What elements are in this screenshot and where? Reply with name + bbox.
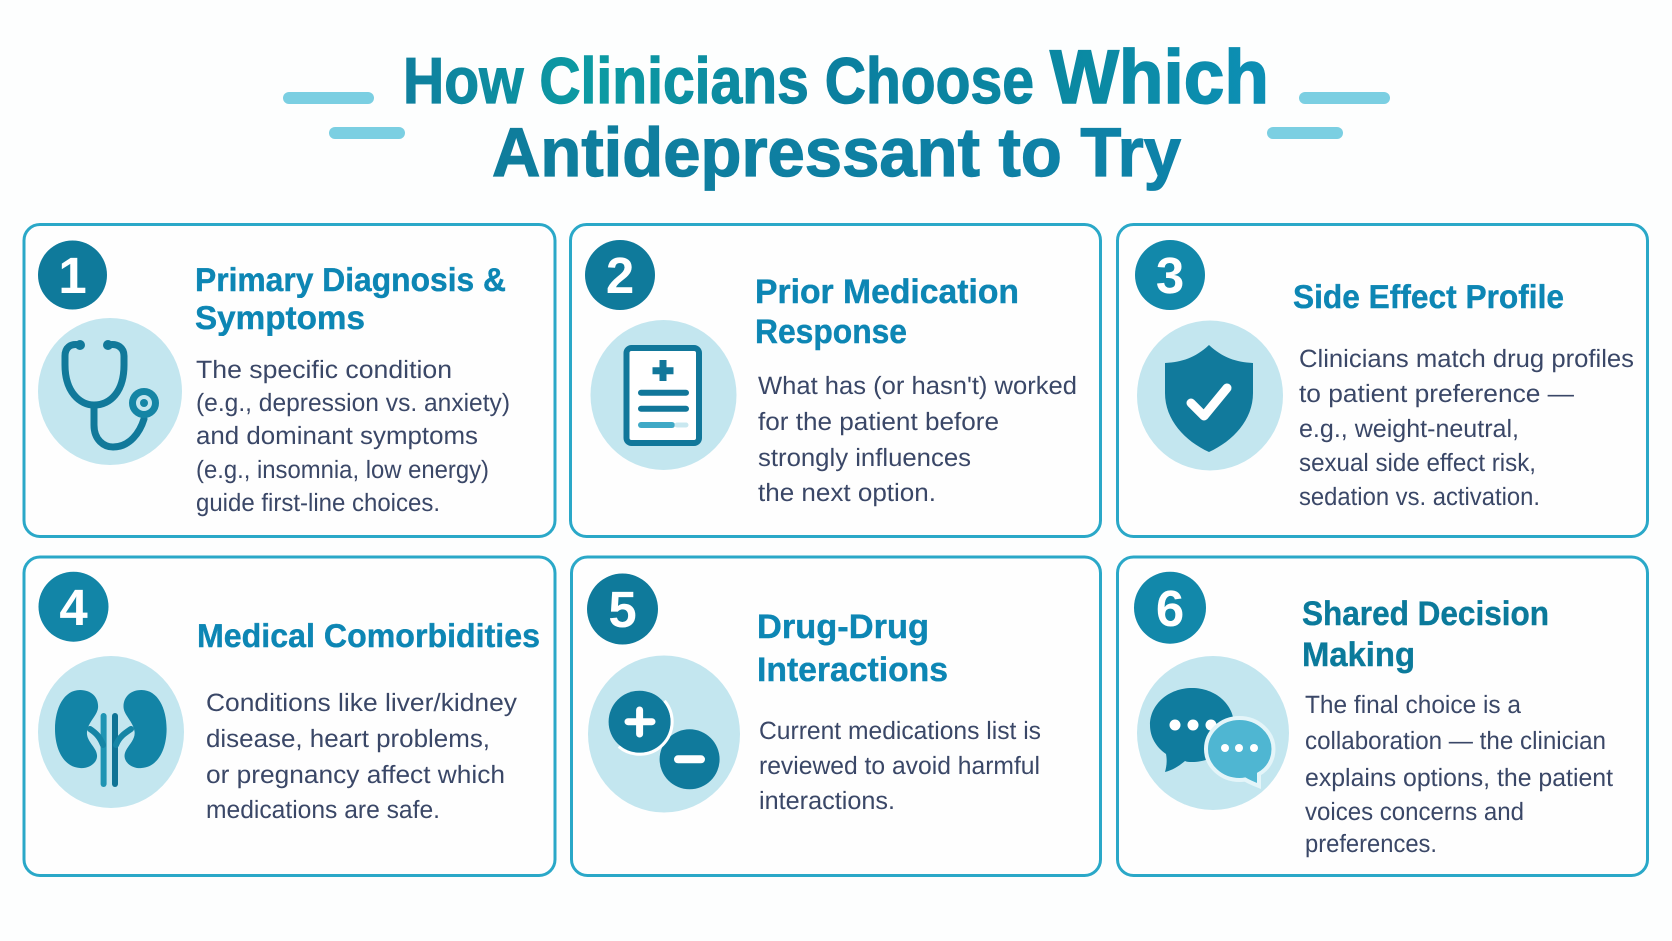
body text: Conditions like liver/kidney bbox=[206, 689, 518, 717]
title accent bars: left bbox=[283, 92, 405, 139]
number badge 4: 4 bbox=[59, 579, 88, 636]
icon: kidneys bbox=[38, 656, 184, 808]
number badge 1 bbox=[38, 240, 107, 310]
number badge 6: 6 bbox=[1156, 580, 1184, 637]
heading: Symptoms bbox=[195, 299, 365, 336]
body text: Clinicians match drug profiles bbox=[1299, 345, 1634, 373]
heading: Drug-Drug bbox=[757, 608, 929, 646]
body text bbox=[759, 717, 1041, 815]
title: Antidepressant to Try bbox=[492, 114, 1181, 191]
heading: Response bbox=[755, 313, 907, 351]
title: Which bbox=[1050, 35, 1269, 120]
body text: for the patient before bbox=[758, 408, 999, 436]
body text: or pregnancy affect which bbox=[206, 761, 505, 789]
body text bbox=[1299, 345, 1634, 511]
body text: explains options, the patient bbox=[1305, 764, 1613, 792]
number badge 1: 1 bbox=[58, 247, 87, 304]
heading: Making bbox=[1302, 636, 1415, 674]
body text bbox=[206, 689, 518, 824]
body text: collaboration — the clinician bbox=[1305, 727, 1606, 755]
body text: the next option. bbox=[758, 479, 936, 507]
body text: interactions. bbox=[759, 787, 895, 815]
icon: medical document bbox=[590, 320, 736, 470]
body text: e.g., weight-neutral, bbox=[1299, 415, 1519, 443]
icon: stethoscope bbox=[38, 318, 182, 465]
body text: guide first-line choices. bbox=[196, 489, 440, 517]
heading bbox=[757, 608, 948, 689]
body text bbox=[758, 372, 1077, 507]
icon: shield with check bbox=[1137, 320, 1283, 470]
body text bbox=[1305, 691, 1613, 858]
number badge 2 bbox=[585, 240, 655, 310]
body text: to patient preference — bbox=[1299, 380, 1574, 408]
body text: The final choice is a bbox=[1305, 691, 1521, 719]
body text: reviewed to avoid harmful bbox=[759, 752, 1040, 780]
panel: primary diagnosis and symptoms bbox=[24, 224, 555, 536]
body text: medications are safe. bbox=[206, 796, 440, 824]
heading: Medical Comorbidities bbox=[197, 617, 540, 654]
panel: shared decision making bbox=[1118, 557, 1648, 876]
number badge 3 bbox=[1135, 240, 1205, 310]
number badge 5: 5 bbox=[608, 581, 637, 638]
heading bbox=[755, 273, 1019, 351]
panel: side effect profile bbox=[1118, 224, 1648, 536]
title bbox=[403, 35, 1269, 191]
heading bbox=[1302, 595, 1549, 674]
number badge 3: 3 bbox=[1156, 247, 1184, 304]
title: How Clinicians Choose bbox=[403, 44, 1034, 117]
heading bbox=[195, 261, 506, 336]
body text: sedation vs. activation. bbox=[1299, 483, 1540, 511]
panel: medical comorbidities bbox=[24, 557, 555, 876]
number badge 6 bbox=[1134, 572, 1206, 644]
body text: The specific condition bbox=[196, 356, 452, 384]
number badge 4 bbox=[38, 572, 108, 642]
icon: plus and minus bbox=[588, 656, 740, 812]
body text: preferences. bbox=[1305, 830, 1437, 858]
number badge 2: 2 bbox=[606, 247, 634, 304]
heading: Side Effect Profile bbox=[1293, 278, 1564, 315]
panel: drug-drug interactions bbox=[572, 557, 1100, 876]
heading: Interactions bbox=[757, 651, 948, 689]
body text bbox=[196, 356, 510, 517]
heading: Prior Medication bbox=[755, 273, 1019, 311]
body text: and dominant symptoms bbox=[196, 422, 478, 450]
panel: prior medication response bbox=[570, 224, 1100, 536]
body text: disease, heart problems, bbox=[206, 725, 490, 753]
body text: Current medications list is bbox=[759, 717, 1041, 745]
body text: (e.g., insomnia, low energy) bbox=[196, 456, 489, 484]
heading: Shared Decision bbox=[1302, 595, 1549, 633]
heading: Primary Diagnosis & bbox=[195, 261, 506, 298]
body text: (e.g., depression vs. anxiety) bbox=[196, 389, 510, 417]
number badge 5 bbox=[587, 574, 658, 644]
icon: chat bubbles bbox=[1137, 656, 1289, 810]
title accent bars: right bbox=[1267, 92, 1390, 139]
body text: strongly influences bbox=[758, 444, 971, 472]
body text: sexual side effect risk, bbox=[1299, 449, 1536, 477]
body text: voices concerns and bbox=[1305, 798, 1524, 826]
body text: What has (or hasn't) worked bbox=[758, 372, 1077, 400]
